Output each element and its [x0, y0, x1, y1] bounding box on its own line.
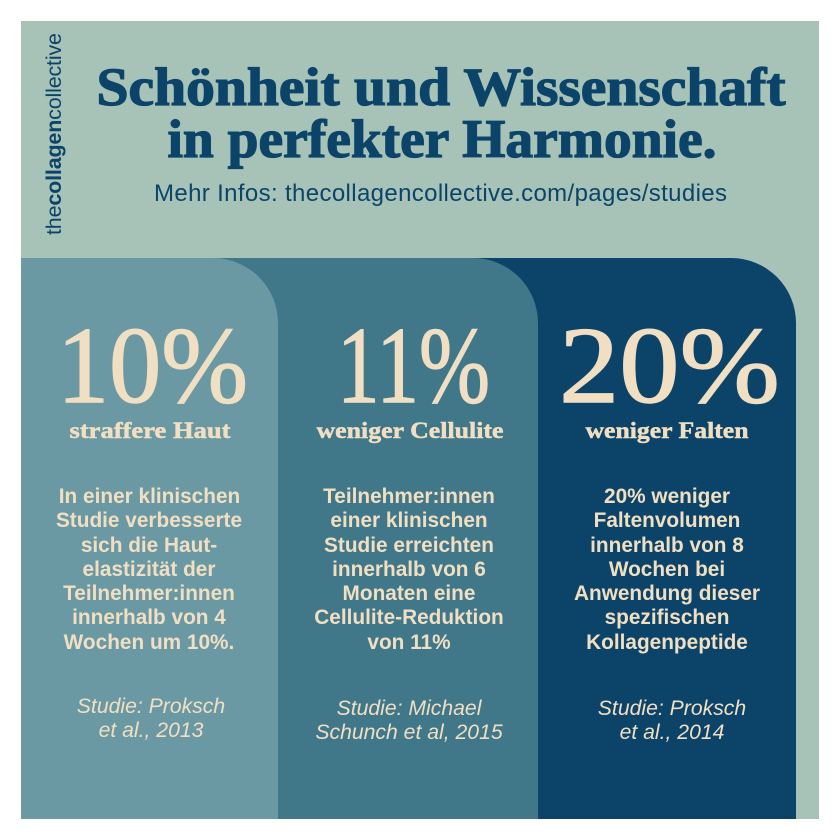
body text: Kollagenpeptide [586, 631, 748, 654]
citation [598, 697, 746, 744]
body text: sich die Haut- [81, 534, 217, 557]
body text: Faltenvolumen [594, 509, 740, 532]
title [96, 57, 786, 169]
body text: innerhalb von 6 [332, 558, 486, 581]
body text: Monaten eine [343, 582, 475, 605]
title: Schönheit und Wissenschaft [96, 57, 786, 117]
citation [315, 697, 503, 744]
stat 20%: 20% [559, 305, 780, 426]
body text: elastizität der [83, 558, 215, 581]
body text: Teilnehmer:innen [323, 485, 495, 508]
body text: innerhalb von 4 [72, 606, 226, 629]
column: 10% [56, 305, 248, 742]
body text: Cellulite-Reduktion [314, 606, 504, 629]
body text: von 11% [367, 631, 451, 654]
body text: einer klinischen [330, 509, 488, 532]
stat 11%: 11% [337, 305, 490, 426]
citation: et al., 2013 [99, 719, 204, 742]
column: 11% [314, 305, 504, 744]
citation [77, 695, 225, 742]
body text [56, 485, 242, 654]
panel: 20% wrinkles background [21, 258, 796, 819]
body text: Studie verbesserte [56, 509, 242, 532]
brand name vertical: thecollagencollective [42, 33, 66, 235]
body text: 20% weniger [604, 485, 730, 508]
heading: weniger Falten: weniger Falten [586, 418, 748, 444]
body text: Wochen bei [609, 558, 725, 581]
citation: Studie: Proksch [598, 697, 746, 720]
title: in perfekter Harmonie. [168, 109, 716, 169]
subtitle link: Mehr Infos: thecollagencollective.com/pages/studies [154, 180, 727, 207]
citation: et al., 2014 [620, 721, 724, 744]
body text: spezifischen [605, 606, 729, 629]
citation: Schunch et al, 2015 [315, 721, 503, 744]
panel: 11% cellulite background [21, 258, 538, 819]
heading: straffere Haut: straffere Haut [70, 418, 231, 444]
body text: Studie erreichten [324, 534, 494, 557]
panel: 10% skin background [21, 258, 278, 819]
body text: innerhalb von 8 [590, 534, 744, 557]
citation: Studie: Proksch [77, 695, 225, 718]
body text [314, 485, 504, 654]
body text: Wochen um 10%. [64, 631, 234, 654]
citation: Studie: Michael [337, 697, 483, 720]
heading: weniger Cellulite: weniger Cellulite [316, 418, 504, 444]
stat 10%: 10% [57, 305, 248, 426]
body text [574, 485, 760, 654]
body text: In einer klinischen [59, 485, 240, 508]
body text: Anwendung dieser [574, 582, 760, 605]
body text: Teilnehmer:innen [63, 582, 235, 605]
column: 20% [559, 305, 780, 744]
